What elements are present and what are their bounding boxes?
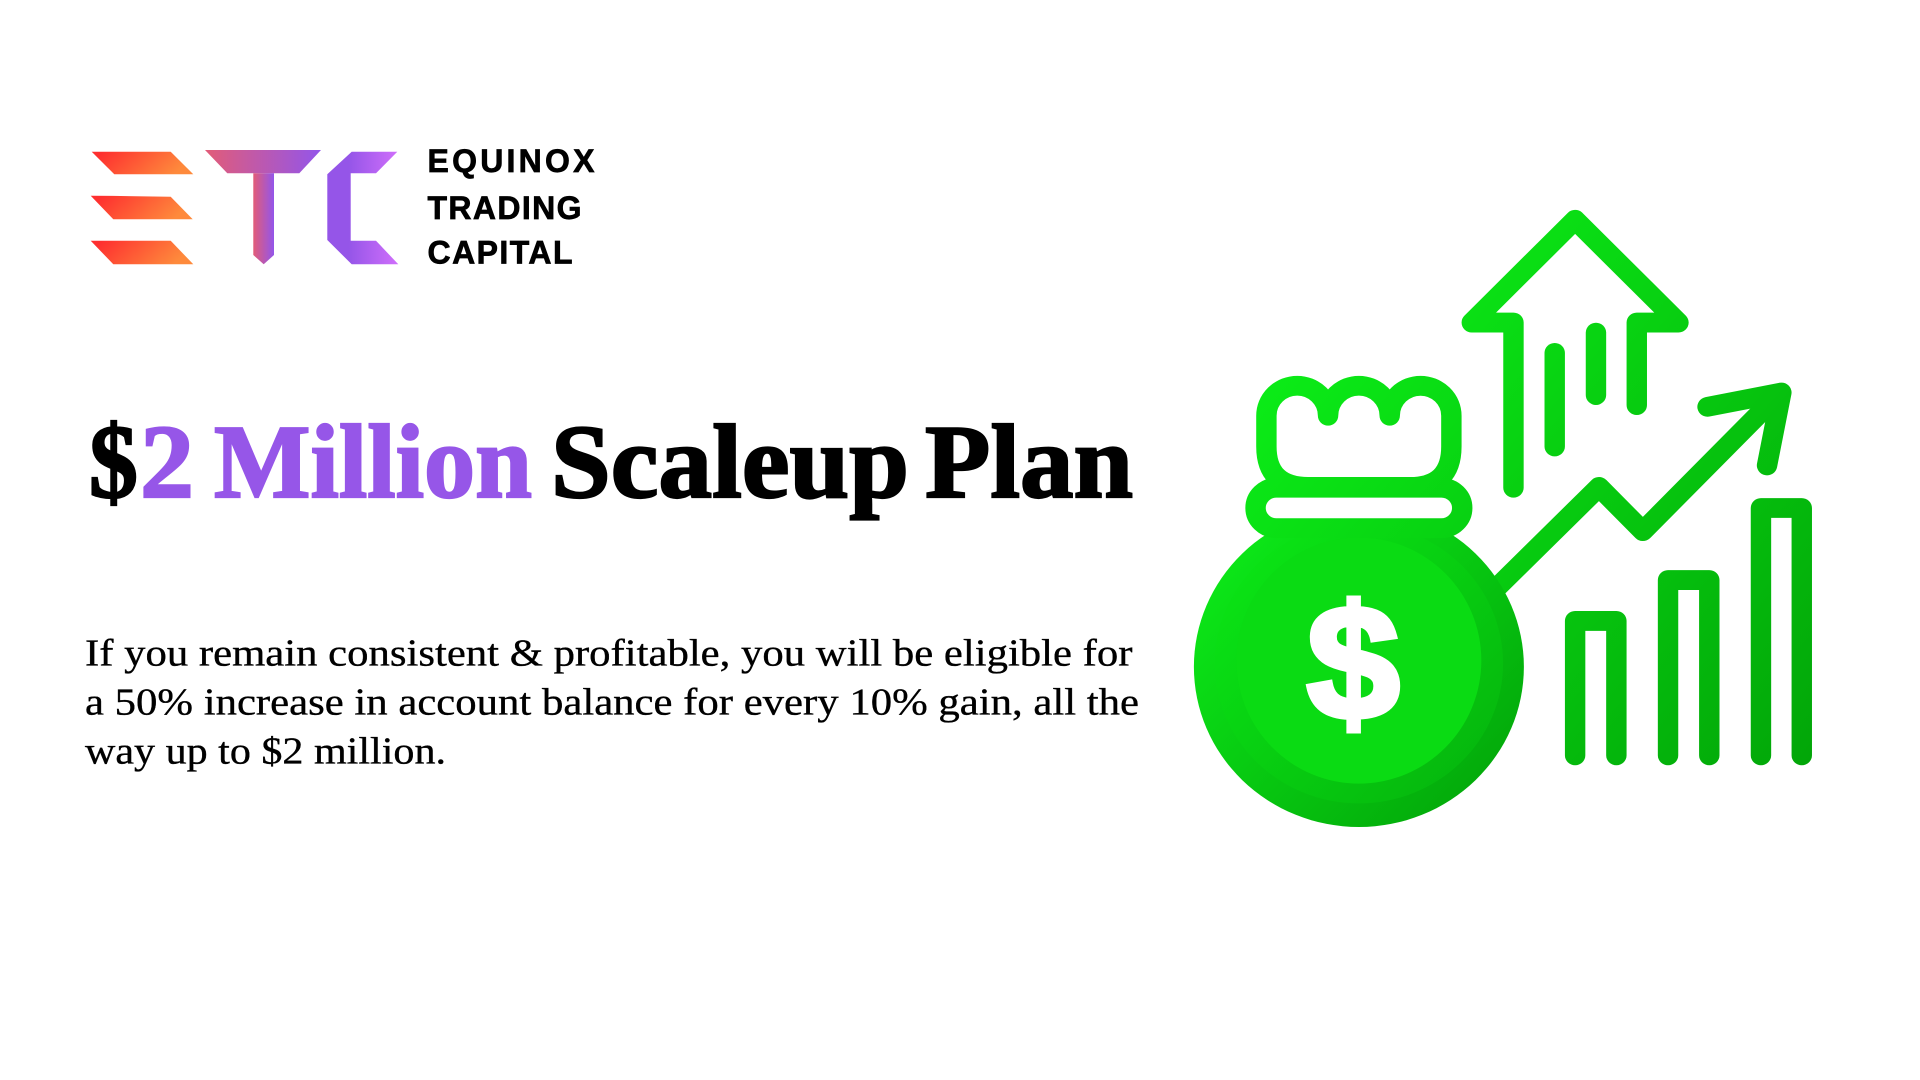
icon: trend arrow — [1493, 393, 1781, 592]
icon: money bag with growth arrows and bars — [1194, 220, 1802, 827]
logo wordmark: EQUINOX — [428, 143, 595, 179]
icon: coin — [1194, 507, 1524, 827]
description text — [85, 632, 1139, 772]
description text: If you remain consistent & profitable, you will be eligible for — [85, 632, 1133, 674]
logo: Equinox Trading Capital — [91, 143, 595, 270]
title: 2 — [140, 403, 194, 520]
icon: bag band — [1256, 488, 1462, 528]
icon: bar chart — [1575, 508, 1802, 755]
logo wordmark — [428, 143, 595, 270]
logo wordmark: CAPITAL — [428, 234, 572, 270]
logo mark: C — [327, 152, 398, 264]
icon: up arrow — [1472, 220, 1678, 488]
icon: dollar sign: $ — [1307, 572, 1400, 753]
title: $ — [89, 403, 138, 520]
icon: bag top — [1266, 386, 1451, 487]
title: Scaleup — [551, 403, 909, 520]
description text: way up to $2 million. — [85, 730, 446, 772]
title — [89, 403, 1133, 520]
title: Plan — [925, 403, 1133, 520]
logo mark: T — [205, 150, 321, 264]
description text: a 50% increase in account balance for every 10% gain, all the — [85, 682, 1139, 724]
logo wordmark: TRADING — [428, 190, 582, 226]
logo mark: E — [91, 152, 193, 264]
title: Million — [214, 403, 532, 520]
